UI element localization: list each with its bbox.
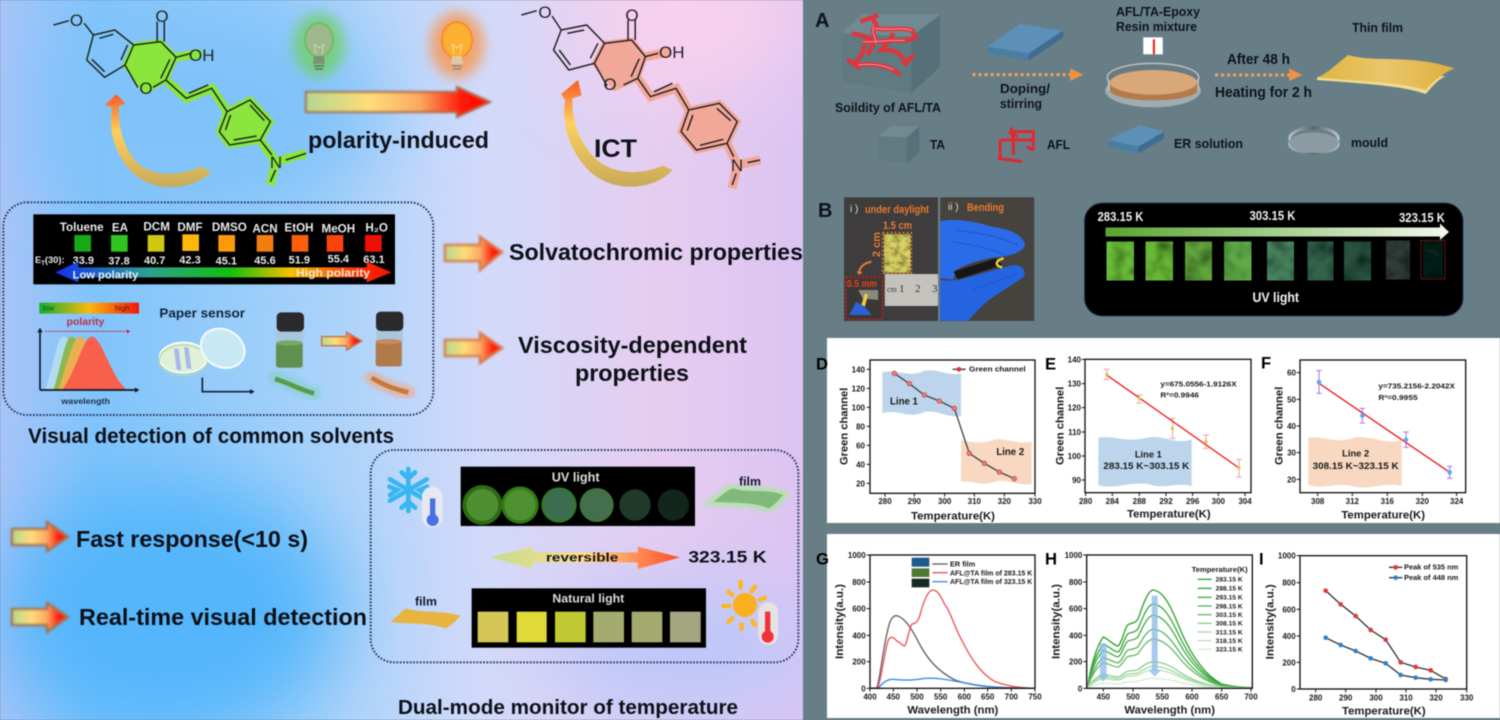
chart G: film emission spectra: 500 <box>910 693 924 702</box>
icon: green film: film <box>739 475 761 489</box>
chart D: green channel vs temperature: 100 <box>852 403 866 412</box>
chart F: Line 2 fit <box>1261 353 1466 521</box>
chart E: Line 1 fit: 304 <box>1238 497 1252 506</box>
solvent colour strip: 55.4 <box>328 254 350 266</box>
text: fast response: Fast response(<10 s) <box>76 526 308 552</box>
solvent colour strip: EA <box>112 222 129 235</box>
solvent colour strip: MeOH <box>321 223 355 236</box>
chart F: Line 2 fit: 308 <box>1311 497 1325 506</box>
chart E: Line 1 fit: 284 <box>1106 497 1120 506</box>
chart H: temperature-dependent spectra: Wavelength (nm) <box>1124 704 1215 716</box>
molecule: orange emissive form <box>521 3 760 188</box>
chart F: Line 2 fit: y=735.2156-2.2042X <box>1378 382 1455 391</box>
chart H: temperature-dependent spectra: 308.15 K <box>1216 621 1243 628</box>
molecule: green emissive form: O <box>70 11 83 30</box>
solvent colour strip: 40.7 <box>144 255 165 267</box>
dotted arrow 2 <box>1215 68 1302 81</box>
molecule: green emissive form: O <box>155 7 169 26</box>
chart G: film emission spectra: 200 <box>852 658 866 667</box>
chart H: temperature-dependent spectra: 293.15 K <box>1216 595 1243 602</box>
chart G: film emission spectra: 800 <box>852 578 866 587</box>
chart E: Line 1 fit: Temperature(K) <box>1127 508 1211 520</box>
chart I: peak intensity vs temperature: 330 <box>1460 693 1474 702</box>
paper sensor dish <box>159 306 255 394</box>
panel B: film photographs: i ) <box>850 204 858 215</box>
chart G: film emission spectra: AFL@TA film of 323.15 K <box>950 577 1033 586</box>
chart E: Line 1 fit: E <box>1045 354 1056 373</box>
spectra schematic: high <box>115 304 129 313</box>
chart E: Line 1 fit: Line 1 <box>1135 449 1162 459</box>
panel A: film fabrication: Resin mixture <box>1116 19 1197 34</box>
panel B: film photographs: cm <box>887 285 898 294</box>
chart E: Line 1 fit: 280 <box>1079 497 1093 506</box>
cuvette icon <box>1143 37 1163 54</box>
chart H: temperature-dependent spectra: 600 <box>1185 693 1199 702</box>
solvent colour strip: DMF <box>177 221 203 234</box>
chart I: peak intensity vs temperature: 600 <box>1282 605 1296 614</box>
chart G: film emission spectra: 400 <box>852 631 866 640</box>
panel A: film fabrication: Thin film <box>1352 20 1403 35</box>
chart F: Line 2 fit: 50 <box>1287 395 1297 404</box>
chart G: film emission spectra: Wavelength (nm) <box>907 704 999 716</box>
chart I: peak intensity vs temperature: 280 <box>1309 693 1323 702</box>
arrow: viscosity <box>445 333 502 363</box>
icon: green light bulb <box>293 13 345 77</box>
solvent colour strip: E <box>35 255 41 265</box>
arrow: real-time <box>12 603 68 632</box>
solvent colour strip: ACN <box>252 222 278 235</box>
chart E: Line 1 fit: R²=0.9946 <box>1160 391 1199 400</box>
spectra schematic: polarity <box>67 317 105 328</box>
text: polarity-induced: polarity-induced <box>308 127 489 153</box>
chart I: peak intensity vs temperature: Peak of 535 nm <box>1404 563 1459 572</box>
molecule: green emissive form: OH <box>189 46 214 65</box>
icon: cold thermometer <box>389 469 443 527</box>
panel B: film photographs: ii ) <box>948 202 959 213</box>
icon: orange light bulb <box>430 12 484 78</box>
solvent colour strip: H₂O <box>365 222 388 235</box>
panel B: film photographs: 0.5 mm <box>847 279 877 290</box>
chart G: film emission spectra: 650 <box>981 693 995 702</box>
panel A: film fabrication: ER solution <box>1174 136 1243 151</box>
panel A: film fabrication: AFL/TA-Epoxy <box>1116 4 1201 19</box>
chart G: film emission spectra: 700 <box>1005 693 1019 702</box>
chart H: temperature-dependent spectra: 0 <box>1078 684 1083 693</box>
arrow: solvatochromic <box>445 237 502 270</box>
panel B: film photographs: 1.5 cm <box>883 220 912 232</box>
chart G: film emission spectra: 600 <box>958 693 972 702</box>
text: ICT: ICT <box>594 135 637 163</box>
chart I: peak intensity vs temperature: Temperature(K) <box>1342 705 1426 717</box>
chart H: temperature-dependent spectra: H <box>1045 549 1057 568</box>
chart I: peak intensity vs temperature: 290 <box>1339 693 1353 702</box>
panel A: film fabrication: Doping/ <box>1000 81 1050 96</box>
chart F: Line 2 fit: R²=0.9955 <box>1378 393 1418 402</box>
chart G: film emission spectra: ER film <box>950 560 976 569</box>
thin film <box>1317 55 1454 94</box>
molecule: orange emissive form: O <box>538 3 552 22</box>
panel A: film fabrication: TA <box>930 137 946 152</box>
chart H: temperature-dependent spectra: 200 <box>1069 658 1083 667</box>
solvent colour strip: 51.9 <box>289 254 310 266</box>
chart G: film emission spectra: 750 <box>1028 693 1042 702</box>
chart F: Line 2 fit: 30 <box>1287 449 1297 458</box>
chart D: green channel vs temperature: Line 2 <box>996 447 1024 458</box>
chart D: green channel vs temperature: D <box>816 354 828 373</box>
panel: left summary background <box>0 0 810 720</box>
chart H: temperature-dependent spectra: 1000 <box>1065 551 1083 560</box>
solvent colour strip: 45.1 <box>216 255 237 267</box>
panel: dual-mode temperature monitor <box>371 450 798 662</box>
heading: dual-mode monitor: Dual-mode monitor of temperature <box>398 697 738 719</box>
chart I: peak intensity vs temperature: 800 <box>1282 579 1296 588</box>
panel B: film photographs: under daylight <box>865 204 929 216</box>
solvent colour strip: 45.6 <box>254 255 276 267</box>
chart G: film emission spectra: 1000 <box>848 551 866 560</box>
spectra schematic <box>37 303 139 406</box>
legend icons <box>878 125 1340 163</box>
chart H: temperature-dependent spectra: 303.15 K <box>1216 612 1243 619</box>
chart F: Line 2 fit: Line 2 <box>1342 449 1369 459</box>
UV light strip <box>461 467 695 526</box>
gradient temperature arrow <box>1106 224 1449 240</box>
chart I: peak intensity vs temperature: 400 <box>1282 632 1296 641</box>
panel C: UV temperature series <box>1084 203 1463 316</box>
chart H: temperature-dependent spectra: 400 <box>1069 631 1083 640</box>
chart E: Line 1 fit: 288 <box>1133 497 1147 506</box>
panel A: film fabrication: AFL <box>1047 137 1070 152</box>
panel B: film photographs <box>818 197 1034 321</box>
solvent colour strip: High polarity <box>296 267 370 279</box>
panel: visual detection of common solvents <box>3 202 433 415</box>
chart F: Line 2 fit: 20 <box>1287 475 1297 484</box>
panel B: film photographs: 1 <box>899 283 904 295</box>
chart H: temperature-dependent spectra: 450 <box>1097 693 1111 702</box>
solvent colour strip: DCM <box>143 220 170 233</box>
chart H: temperature-dependent spectra <box>1045 549 1258 716</box>
chart D: green channel vs temperature: Line 1 <box>890 396 919 407</box>
text: 323.15 K: 323.15 K <box>688 547 767 566</box>
blue resin block <box>988 24 1063 61</box>
chart D: green channel vs temperature: 280 <box>878 497 892 506</box>
panel B: film photographs: 3 <box>932 283 938 295</box>
chart F: Line 2 fit: Temperature(K) <box>1341 509 1425 521</box>
molecule: green emissive form <box>54 7 306 187</box>
chart F: Line 2 fit: 320 <box>1416 497 1430 506</box>
icon: gold film: film <box>415 595 437 609</box>
molecule: orange emissive form: OH <box>659 43 684 62</box>
panel A: film fabrication: stirring <box>1000 96 1042 111</box>
panel C: UV temperature series: 283.15 K <box>1098 209 1144 224</box>
chart G: film emission spectra: 450 <box>887 693 901 702</box>
arrow: fast response <box>12 522 68 551</box>
chart F: Line 2 fit: F <box>1261 353 1271 372</box>
chart G: film emission spectra: 550 <box>934 693 948 702</box>
chart H: temperature-dependent spectra: Temperature(K) <box>1192 565 1248 574</box>
solvent colour strip: 42.3 <box>179 254 201 266</box>
film samples <box>1106 240 1445 280</box>
chart E: Line 1 fit: 292 <box>1159 497 1173 506</box>
chart I: peak intensity vs temperature: Peak of 448 nm <box>1404 573 1459 582</box>
chart F: Line 2 fit: 60 <box>1287 369 1297 378</box>
arrow: reversible <box>490 547 680 569</box>
solvent colour strip: (30): <box>45 255 65 265</box>
molecule: green emissive form: N <box>270 153 282 172</box>
chart D: green channel vs temperature: 20 <box>856 479 866 488</box>
chart E: Line 1 fit: 120 <box>1068 404 1082 413</box>
chart F: Line 2 fit: 316 <box>1381 497 1395 506</box>
chart D: green channel vs temperature: 310 <box>968 497 982 506</box>
panel A: film fabrication: Heating for 2 h <box>1215 84 1312 101</box>
heading: visual detection: Visual detection of common solvents <box>28 425 394 448</box>
chart F: Line 2 fit: 312 <box>1346 497 1360 506</box>
chart D: green channel vs temperature: 140 <box>852 365 866 374</box>
chart I: peak intensity vs temperature <box>1259 549 1474 717</box>
chart F: Line 2 fit: 324 <box>1450 497 1464 506</box>
chart D: green channel vs temperature: 60 <box>856 441 866 450</box>
chart H: temperature-dependent spectra: 550 <box>1156 693 1170 702</box>
panel A: film fabrication: A <box>815 10 829 32</box>
chart D: green channel vs temperature: 80 <box>856 422 866 431</box>
chart E: Line 1 fit: 140 <box>1068 355 1082 364</box>
chart E: Line 1 fit: Green channel <box>1055 387 1067 465</box>
chart G: film emission spectra: G <box>816 549 829 568</box>
chart D: green channel vs temperature: Green channel <box>969 365 1026 374</box>
chart E: Line 1 fit <box>1045 354 1252 520</box>
chart H: temperature-dependent spectra: 283.15 K <box>1216 577 1243 584</box>
text: viscosity-dependent properties: properties <box>575 360 689 386</box>
chart I: peak intensity vs temperature: 1000 <box>1278 552 1296 561</box>
panel C: UV temperature series: UV light <box>1252 289 1299 305</box>
chart E: Line 1 fit: 100 <box>1068 452 1082 461</box>
chart H: temperature-dependent spectra: 323.15 K <box>1216 647 1243 654</box>
white chart panels <box>827 338 1500 718</box>
panel A: film fabrication: mould <box>1351 135 1388 150</box>
chart I: peak intensity vs temperature: 310 <box>1399 693 1413 702</box>
spectra schematic: wavelength <box>60 396 110 406</box>
chart H: temperature-dependent spectra: 600 <box>1069 605 1083 614</box>
chart H: temperature-dependent spectra: 318.15 K <box>1216 638 1243 645</box>
chart D: green channel vs temperature: 320 <box>998 497 1012 506</box>
molecule: orange emissive form: O <box>603 75 617 94</box>
paper sensor dish: Paper sensor <box>159 306 245 320</box>
vials and strips <box>275 312 408 393</box>
chart D: green channel vs temperature: 290 <box>908 497 922 506</box>
chart I: peak intensity vs temperature: 300 <box>1369 693 1383 702</box>
chart H: temperature-dependent spectra: Intensity(a.u.) <box>1050 584 1062 659</box>
panel B: film photographs: 2 <box>915 283 920 295</box>
solvent colour strip: Toluene <box>60 221 104 234</box>
chart D: green channel vs temperature: 120 <box>852 384 866 393</box>
panel B: film photographs: B <box>818 200 832 222</box>
chart H: temperature-dependent spectra: 298.15 K <box>1216 603 1243 610</box>
UV light strip: UV light <box>552 471 600 485</box>
chart H: temperature-dependent spectra: 800 <box>1069 578 1083 587</box>
panel A: film fabrication: After 48 h <box>1227 51 1290 68</box>
chart I: peak intensity vs temperature: 0 <box>1291 685 1296 694</box>
chart D: green channel vs temperature: Green channel <box>839 388 851 465</box>
chart F: Line 2 fit: 308.15 K~323.15 K <box>1313 461 1399 471</box>
chart D: green channel vs temperature: Temperature(K) <box>911 510 995 522</box>
chart H: temperature-dependent spectra: 700 <box>1244 693 1258 702</box>
dish with mixture <box>1105 63 1201 107</box>
chart I: peak intensity vs temperature: Intensity(a.u.) <box>1265 584 1277 659</box>
chart F: Line 2 fit: 40 <box>1287 422 1297 431</box>
chart D: green channel vs temperature: 300 <box>938 497 952 506</box>
panel B: film photographs: 2 cm <box>871 232 883 257</box>
chart H: temperature-dependent spectra: 313.15 K <box>1216 629 1243 636</box>
text: viscosity-dependent properties: Viscosity-dependent <box>518 332 747 358</box>
text: viscosity-dependent properties <box>518 332 747 386</box>
cube with network <box>841 14 940 93</box>
molecule: orange emissive form: N <box>731 156 743 175</box>
natural light strip <box>472 588 706 648</box>
icon: green film <box>713 475 783 508</box>
chart E: Line 1 fit: 110 <box>1068 428 1082 437</box>
solvent colour strip: T <box>41 261 45 267</box>
text: real-time visual detection: Real-time visual detection <box>79 604 367 630</box>
chart I: peak intensity vs temperature: I <box>1259 549 1264 568</box>
text: solvatochromic properties: Solvatochromic properties <box>509 239 803 265</box>
chart H: temperature-dependent spectra: 288.15 K <box>1216 586 1243 593</box>
arrow: reversible: reversible <box>546 551 618 565</box>
panel A: film fabrication: Soildity of AFL/TA <box>835 100 942 115</box>
spectra schematic: low <box>43 304 55 313</box>
chart G: film emission spectra: 600 <box>852 605 866 614</box>
panel C: UV temperature series: 303.15 K <box>1250 208 1296 223</box>
solvent colour strip: 63.1 <box>363 254 385 266</box>
chart D: green channel vs temperature: 330 <box>1028 497 1042 506</box>
solvent colour strip: Low polarity <box>73 269 138 281</box>
chart G: film emission spectra: 400 <box>863 693 877 702</box>
chart G: film emission spectra: 0 <box>861 684 866 693</box>
chart D: green channel vs temperature: 40 <box>856 460 866 469</box>
arrow: polarity-induced <box>306 87 490 117</box>
chart E: Line 1 fit: 300 <box>1212 497 1226 506</box>
chart E: Line 1 fit: y=675.0556-1.9126X <box>1160 380 1237 389</box>
chart G: film emission spectra: AFL@TA film of 283.15 K <box>950 568 1033 577</box>
dotted arrow 1 <box>973 68 1083 81</box>
panel A: film fabrication <box>815 4 1454 163</box>
molecule: orange emissive form: O <box>625 6 639 25</box>
chart I: peak intensity vs temperature: 320 <box>1429 693 1443 702</box>
chart E: Line 1 fit: 296 <box>1186 497 1200 506</box>
icon: hot thermometer <box>723 582 778 645</box>
chart H: temperature-dependent spectra: 650 <box>1215 693 1229 702</box>
chart E: Line 1 fit: 283.15 K~303.15 K <box>1103 461 1190 471</box>
chart G: film emission spectra <box>816 549 1042 716</box>
chart E: Line 1 fit: 130 <box>1068 380 1082 389</box>
chart I: peak intensity vs temperature: 200 <box>1282 658 1296 667</box>
solvent colour strip: EtOH <box>284 222 314 235</box>
panel C: UV temperature series: 323.15 K <box>1399 210 1446 225</box>
chart F: Line 2 fit: Green channel <box>1273 387 1285 465</box>
solvent colour strip: 37.8 <box>108 256 130 268</box>
panel B: film photographs: Bending <box>967 202 1004 214</box>
icon: gold film <box>390 595 461 628</box>
chart H: temperature-dependent spectra: 500 <box>1126 693 1140 702</box>
solvent colour strip <box>33 214 395 284</box>
natural light strip: Natural light <box>552 592 624 606</box>
molecule: green emissive form: O <box>139 79 153 98</box>
solvent colour strip: 33.9 <box>73 255 94 267</box>
chart D: green channel vs temperature <box>816 354 1042 522</box>
chart G: film emission spectra: Intensity(a.u.) <box>834 584 846 659</box>
chart E: Line 1 fit: 90 <box>1072 476 1082 485</box>
solvent colour strip: DMSO <box>212 221 247 234</box>
